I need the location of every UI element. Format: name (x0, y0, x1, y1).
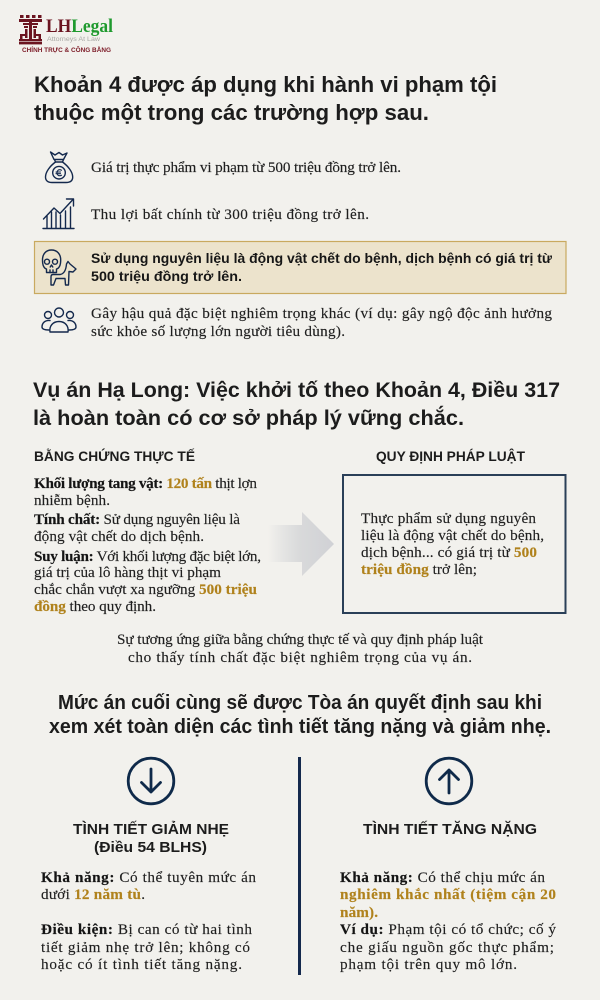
icon: group of people (42, 308, 76, 332)
evidence text: Tính chất: Sử dụng nguyên liệu là (34, 511, 240, 528)
icon: down arrow circle (128, 758, 174, 804)
heading: final sentence (49, 692, 551, 738)
panel: legal provision (343, 449, 566, 613)
list item: illicit profit (43, 199, 369, 228)
evidence heading: BẰNG CHỨNG THỰC TẾ (34, 449, 195, 464)
item text: Giá trị thực phẩm vi phạm từ 500 triệu đồng trở lên. (91, 159, 401, 176)
heading: Hạ Long case (33, 379, 560, 430)
logo subtitle: Attorneys At Law (47, 36, 101, 43)
icon: skull and dog (42, 250, 76, 285)
caption: correspondence note: Sự tương ứng giữa bằng chứng thực tế và quy định pháp luật (117, 631, 484, 648)
heading: Khoản 4 (34, 72, 497, 125)
icon: growth chart (43, 199, 74, 228)
logo slogan: CHÍNH TRỰC & CÔNG BẰNG (22, 46, 111, 54)
heading: Khoản 4: Khoản 4 được áp dụng khi hành vi phạm tội (34, 72, 497, 97)
provision text: triệu đồng trở lên; (361, 561, 477, 578)
provision text: liệu là động vật chết do bệnh, (361, 527, 544, 544)
mitigating text (41, 869, 256, 973)
callout text: Sử dụng nguyên liệu là động vật chết do bệnh, dịch bệnh có giá trị từ (91, 251, 552, 266)
mitigating text: hoặc có ít tình tiết tăng nặng. (41, 956, 242, 973)
item text (91, 305, 552, 340)
evidence text (34, 475, 261, 615)
evidence text: Suy luận: Với khối lượng đặc biệt lớn, (34, 548, 261, 565)
mitigating heading (73, 821, 229, 856)
mitigating text: tiết giảm nhẹ trở lên; không có (41, 939, 250, 956)
mitigating text: Khả năng: Có thể tuyên mức án (41, 869, 256, 886)
aggravating text: năm). (340, 904, 378, 921)
panel: aggravating circumstances (340, 758, 556, 973)
panel: mitigating circumstances (41, 758, 256, 973)
aggravating text (340, 869, 556, 973)
heading: Hạ Long case: là hoàn toàn có cơ sở pháp lý vững chắc. (33, 406, 464, 430)
item text: sức khỏe số lượng lớn người tiêu dùng). (91, 323, 345, 340)
heading: Hạ Long case: Vụ án Hạ Long: Việc khởi tố theo Khoản 4, Điều 317 (33, 379, 560, 402)
aggravating text: che giấu nguồn gốc thực phẩm; (340, 939, 554, 956)
list item: value 500 million (46, 152, 401, 182)
aggravating text: Khả năng: Có thể chịu mức án (340, 869, 545, 886)
evidence text: giá trị của lô hàng thịt vi phạm (34, 564, 221, 581)
callout box (34, 242, 566, 294)
evidence text: nhiễm bệnh. (34, 492, 110, 509)
item text: Gây hậu quả đặc biệt nghiêm trọng khác (ví dụ: gây ngộ độc ảnh hưởng (91, 305, 552, 322)
evidence text: Khối lượng tang vật: 120 tấn thịt lợn (34, 475, 257, 492)
callout text: 500 triệu đồng trở lên. (91, 269, 242, 284)
panel: factual evidence (34, 449, 261, 615)
evidence text: chắc chắn vượt xa ngưỡng 500 triệu (34, 581, 258, 598)
caption: correspondence note (117, 631, 484, 666)
divider between panels (298, 757, 301, 975)
list item: severe consequences (42, 305, 552, 340)
provision text (361, 510, 544, 578)
heading: final sentence: Mức án cuối cùng sẽ được Tòa án quyết định sau khi (58, 692, 542, 714)
evidence text: động vật chết do dịch bệnh. (34, 528, 204, 545)
aggravating text: Ví dụ: Phạm tội có tổ chức; cố ý (340, 921, 556, 938)
item text: Thu lợi bất chính từ 300 triệu đồng trở lên. (91, 206, 369, 223)
callout text (91, 251, 552, 284)
mitigating text: dưới 12 năm tù. (41, 886, 145, 903)
mitigating heading: TÌNH TIẾT GIẢM NHẸ (73, 821, 229, 838)
heading: Khoản 4: thuộc một trong các trường hợp sau. (34, 100, 429, 125)
mitigating heading: (Điều 54 BLHS) (94, 839, 207, 856)
aggravating heading: TÌNH TIẾT TĂNG NẶNG (363, 821, 537, 838)
icon: up arrow circle (426, 758, 472, 804)
provision text: dịch bệnh... có giá trị từ 500 (361, 544, 537, 561)
logo: LHLegal (19, 15, 113, 54)
callout: highlighted diseased animal material (34, 242, 566, 294)
aggravating text: nghiêm khắc nhất (tiệm cận 20 (340, 886, 556, 903)
provision heading: QUY ĐỊNH PHÁP LUẬT (376, 449, 526, 464)
evidence text: đồng theo quy định. (34, 598, 156, 615)
heading: final sentence: xem xét toàn diện các tình tiết tăng nặng và giảm nhẹ. (49, 716, 551, 738)
provision text: Thực phẩm sử dụng nguyên (361, 510, 536, 527)
aggravating text: phạm tội trên quy mô lớn. (340, 956, 517, 973)
mitigating text: Điều kiện: Bị can có từ hai tình (41, 921, 252, 938)
icon: money bag (46, 152, 73, 182)
arrow: evidence to law (268, 512, 334, 576)
caption: correspondence note: cho thấy tính chất đặc biệt nghiêm trọng của vụ án. (128, 649, 472, 666)
provision box (343, 475, 566, 613)
icon: logo tower (19, 15, 42, 44)
logo wordmark: LHLegal (46, 17, 113, 37)
